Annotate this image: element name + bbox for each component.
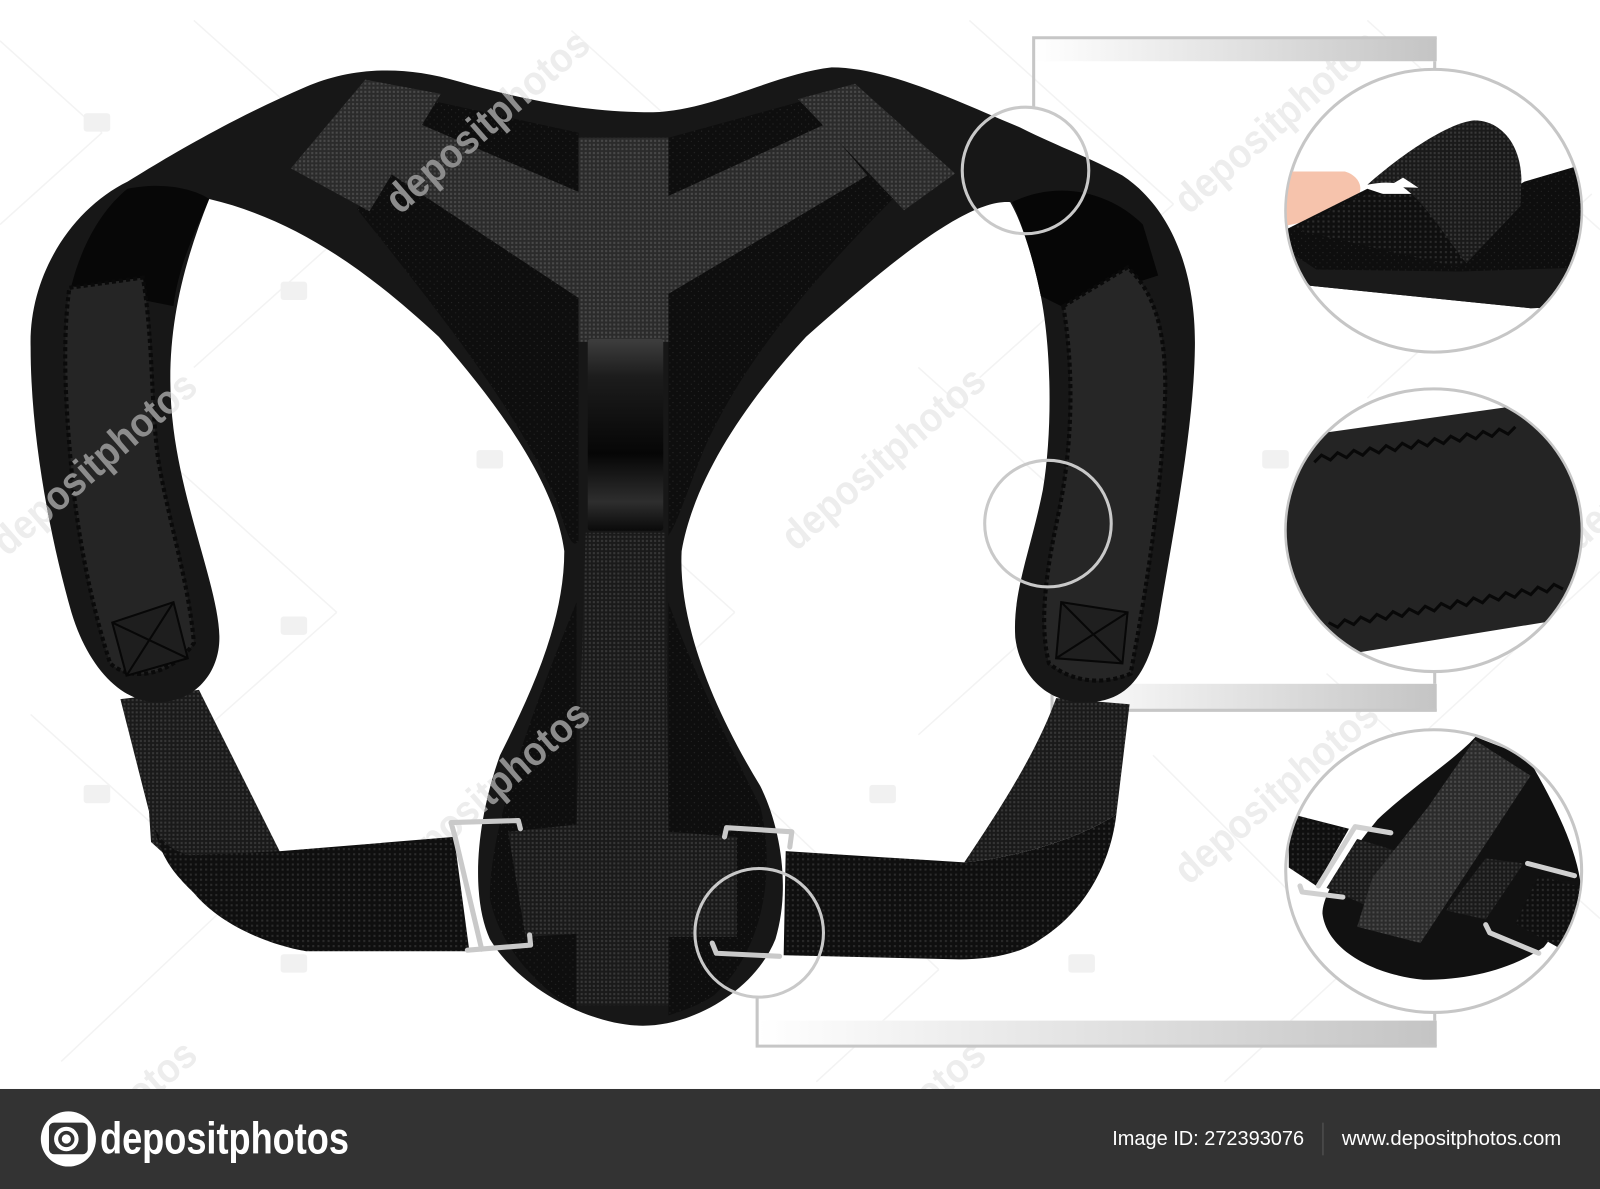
callout circle: shoulder [962, 107, 1089, 234]
base strap [1284, 163, 1587, 308]
left shoulder webbing [291, 80, 441, 211]
watermark text on background: depositphotos [1165, 691, 1387, 893]
flat webbing [1291, 194, 1480, 267]
watermark text on background: depositphotos [772, 357, 994, 559]
left pad reinforcement box [112, 602, 188, 676]
watermark text over harness: depositphotos [376, 20, 598, 222]
watermark text over harness: depositphotos [376, 691, 598, 893]
watermark text on background: depositphotos [376, 691, 598, 893]
detail lens 1: velcro tab [1281, 69, 1587, 352]
website url: www.depositphotos.com [1341, 1128, 1561, 1150]
central lower webbing [577, 533, 668, 1005]
watermark text on background: depositphotos [1165, 20, 1387, 222]
right diagonal webbing [668, 125, 867, 294]
centre strap right [668, 832, 737, 937]
connector: top callout bracket [1034, 38, 1437, 107]
strap lower edge [1294, 255, 1568, 308]
stitching bottom [1329, 583, 1563, 629]
right pad neoprene [1044, 267, 1165, 681]
central vertical webbing [579, 138, 668, 342]
right metal buckle [712, 828, 792, 956]
connector: bottom callout bracket [757, 998, 1437, 1046]
divider [1322, 1123, 1323, 1155]
connector: middle callout bracket [1052, 587, 1437, 711]
left pad shaded top [71, 186, 209, 306]
glossy ribbon [588, 339, 663, 531]
logo icon: camera [41, 1111, 96, 1167]
left diagonal webbing [386, 122, 579, 298]
callout circle: pad [985, 460, 1111, 587]
left lower strap [120, 690, 469, 951]
rolled velcro tab [1367, 120, 1521, 263]
watermark camera icons [84, 113, 1289, 973]
right shoulder webbing [798, 84, 955, 210]
detail lens 2: neoprene [1281, 389, 1587, 672]
right pad shaded top [1012, 191, 1158, 306]
stitching top [1313, 427, 1516, 462]
right lower strap [784, 698, 1130, 959]
watermark text on background: depositphotos [376, 20, 598, 222]
logo wordmark: depositphotos [100, 1112, 349, 1163]
right pad reinforcement box [1056, 602, 1128, 663]
detail lens 3: buckle close-up [1286, 730, 1584, 1012]
tab opening [1394, 178, 1418, 188]
image id: Image ID: 272393076 [1112, 1128, 1304, 1150]
velcro panel lower [490, 602, 767, 1015]
harness body [31, 67, 1195, 1026]
finger [1281, 171, 1360, 227]
velcro panel right [668, 100, 898, 536]
footer bar [0, 1089, 1600, 1189]
velcro panel left [357, 100, 579, 544]
watermark text over harness [0, 20, 598, 893]
left metal buckle [451, 821, 531, 950]
centre strap left [508, 825, 577, 937]
left pad neoprene [65, 278, 194, 674]
callout circle: buckle [695, 869, 823, 997]
